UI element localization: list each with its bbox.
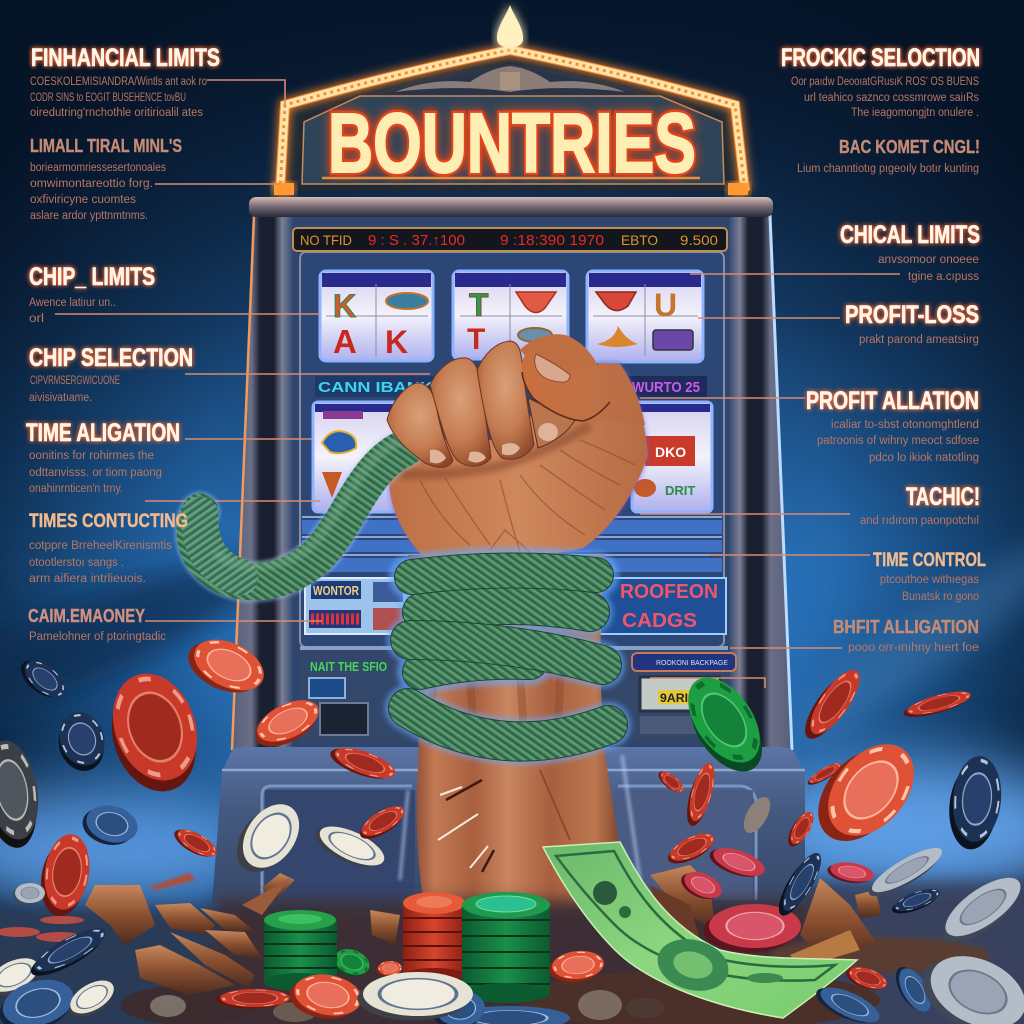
left callout: financial limits: CODR SINS to EOGIT BUSEHENCE tovBU xyxy=(30,92,186,104)
machine base xyxy=(212,747,805,905)
lower display panels: WONTOR xyxy=(313,583,359,598)
left callout: limall tiral mins: omwimontareottio forg. xyxy=(30,178,153,190)
leader lines xyxy=(55,80,900,688)
right callout: time control: ptcouthoe withıegas xyxy=(880,574,979,586)
left callout: times contucting: TIMES CONTUCTING xyxy=(29,511,188,532)
neon labels xyxy=(315,376,707,397)
left callout: times contucting: cotppre BrreheelKirenismtis xyxy=(29,540,172,552)
left callout: time aligation: oonitins for rohirmes the xyxy=(29,450,154,462)
left callout: chip selection: aivisivatıame. xyxy=(29,392,92,404)
right callout: profit allation: icaliar to-sbst otonomghtlend xyxy=(831,419,979,431)
right callout: profit-loss: prakt parond ameatsiırg xyxy=(859,334,979,346)
arm xyxy=(408,555,628,915)
ground chips xyxy=(0,840,1024,1024)
right callout: profit allation: pdco lo ikiok natotling xyxy=(869,452,979,464)
left callout: time aligation xyxy=(26,419,180,495)
right callout: chical limits xyxy=(840,221,980,283)
light frame stripes xyxy=(302,520,722,572)
left callout: caim emaoney xyxy=(28,606,166,643)
fingers and thumb xyxy=(387,334,645,467)
LED readout bar: 9.500 xyxy=(680,232,718,248)
left callout: chip selection xyxy=(29,344,193,404)
LED readout bar: 9 : S . 37.↑100 xyxy=(368,232,465,249)
right callout: tactic: TACHIC! xyxy=(906,483,980,511)
left callout: limall tiral mins xyxy=(30,136,182,222)
right callout: chical limits: anvsomoor onoeee xyxy=(878,254,979,266)
upper reel windows: T xyxy=(469,287,489,323)
right callout: tactic xyxy=(860,483,980,527)
left callout: time aligation: onahinrnticen'n trny. xyxy=(29,483,123,495)
left callout: limall tiral mins: oxfiviricyne cuomtes xyxy=(30,194,136,206)
lower control panel: ROOKONI BACKPAGE xyxy=(656,660,728,667)
left callout: limall tiral mins: aslare ardor ypttnmtnms. xyxy=(30,210,148,222)
lower reel windows: DKO xyxy=(655,444,686,460)
lower reel windows xyxy=(313,402,712,512)
right callout: bac komet cngl: Lium channtiotıg pıgeoıly botır kunting xyxy=(797,163,979,175)
right callout: chical limits: tgine a.cıpuss xyxy=(908,271,979,283)
green stack left xyxy=(264,910,337,991)
LED readout bar: 9 :18:390 1970 xyxy=(500,232,604,249)
falling chips xyxy=(0,628,1005,919)
LED readout bar: EBTO xyxy=(621,232,658,248)
neon labels: CANN IBANK xyxy=(318,379,433,396)
upper reel windows: U xyxy=(654,287,677,323)
small red chip xyxy=(377,961,402,976)
thumb xyxy=(522,352,645,425)
right callout: time control: Bunatsk ro gono xyxy=(902,591,979,603)
index knuckle xyxy=(520,334,600,372)
left callout: caim emaoney: Pamelohner of ptoringtadic xyxy=(29,631,166,643)
left callout: time aligation: odttanvisss. or tiom paong xyxy=(29,467,162,479)
right callout: profit allation: PROFIT ALLATION xyxy=(806,387,979,415)
dollar bill xyxy=(543,842,857,1018)
upper reel windows: K xyxy=(333,288,356,324)
fourth finger xyxy=(528,398,575,448)
green stack right xyxy=(462,892,550,1003)
left callout: chip limits: orl xyxy=(29,313,44,325)
right callout: chical limits: CHICAL LIMITS xyxy=(840,221,980,249)
left callout: times contucting: otootlerstoı sangs . xyxy=(29,557,124,569)
upper reel windows: K xyxy=(385,324,408,360)
LED readout bar: NO TFID xyxy=(300,232,352,248)
lower display panels: ROOFEON xyxy=(620,581,718,603)
right callout: profit-loss: PROFIT-LOSS xyxy=(845,301,979,329)
thumbnail xyxy=(534,354,570,382)
left callout: chip selection: CIPVRMSERGWICUONE xyxy=(30,375,120,387)
finger one xyxy=(387,383,453,467)
LED readout bar xyxy=(293,228,727,251)
left callout: caim emaoney: CAIM.EMAONEY xyxy=(28,606,145,626)
lower control panel: 9ARI xyxy=(660,691,688,705)
right callout: profit allation xyxy=(806,387,979,464)
chip stacks xyxy=(264,892,550,1003)
right callout: time control: TIME CONTROL xyxy=(873,550,986,571)
flame xyxy=(497,5,523,48)
upper reel windows: T xyxy=(467,323,485,356)
right callout: bhfit alligation xyxy=(833,617,979,654)
left callout: chip limits: CHIP_ LIMITS xyxy=(29,263,155,291)
left callout: chip limits xyxy=(29,263,155,325)
left callout: limall tiral mins: boriearmomriessesertonoales xyxy=(30,162,166,174)
left callout: limall tiral mins: LIMALL TIRAL MINL'S xyxy=(30,136,182,156)
lower reel windows: DRIT xyxy=(665,483,695,498)
title: BOUNTRIES xyxy=(328,96,696,190)
finger two xyxy=(430,358,491,466)
lower display panels xyxy=(305,578,726,634)
right callout: time control xyxy=(873,550,986,603)
left callout: times contucting xyxy=(29,511,188,585)
rope coils xyxy=(408,570,608,741)
palm of fist xyxy=(389,363,648,561)
left callout: time aligation: TIME ALIGATION xyxy=(26,419,180,447)
right callout: profit allation: patroonis of wihny meoct sdfose xyxy=(817,435,979,447)
left callout: chip selection: CHIP SELECTION xyxy=(29,344,193,372)
upper reel windows: A xyxy=(333,323,357,360)
lower display panels: CADGS xyxy=(622,610,697,632)
top ledge xyxy=(249,197,773,217)
right callout: frockic selection xyxy=(781,44,980,119)
right callout: bhfit alligation: BHFIT ALLIGATION xyxy=(833,617,979,637)
right callout: bhfit alligation: pooo orr-ınıhny hıert foe xyxy=(848,642,979,654)
finger three xyxy=(477,341,534,459)
marquee sign xyxy=(274,5,748,195)
neon labels: WURTO 25 xyxy=(632,379,700,396)
lower control panel xyxy=(300,646,736,742)
red stack xyxy=(403,892,465,982)
left callout: financial limits: FINHANCIAL LIMITS xyxy=(31,44,220,72)
small green chip xyxy=(328,944,373,981)
left callout: financial limits: COESKOLEMISIANDRA/Wintls ant aok ro xyxy=(30,76,207,88)
fingernails xyxy=(430,443,520,463)
right callout: bac komet cngl: BAC KOMET CNGL! xyxy=(839,137,980,157)
thumb crease xyxy=(522,372,610,421)
right callout: frockic selection: url teahico saznco cossmrowe saiıRs xyxy=(804,92,979,104)
upper reel windows xyxy=(320,271,703,362)
lower control panel: NAIT THE SFIO xyxy=(310,660,387,674)
right callout: frockic selection: Oor paıdw DeooıatGRusıK ROS' OS BUENS xyxy=(791,76,979,88)
rope tail xyxy=(195,442,405,582)
right callout: bac komet cngl xyxy=(797,137,980,175)
title: BOUNTRIES xyxy=(328,96,696,190)
right callout: frockic selection: The ieagomongjtn onulere . xyxy=(851,107,979,119)
rubble xyxy=(0,865,990,1024)
left callout: times contucting: arm aifiera intrlieuois. xyxy=(29,573,146,585)
right callout: profit-loss xyxy=(845,301,979,346)
left callout: chip limits: Awence latiıur un.. xyxy=(29,297,116,309)
left callout: financial limits: oiredutring'rnchothle oritirioalil ates xyxy=(30,107,203,119)
slot machine cabinet xyxy=(232,197,792,750)
left callout: financial limits xyxy=(30,44,220,119)
right callout: tactic: and rıdırom paonpotchıl xyxy=(860,515,979,527)
